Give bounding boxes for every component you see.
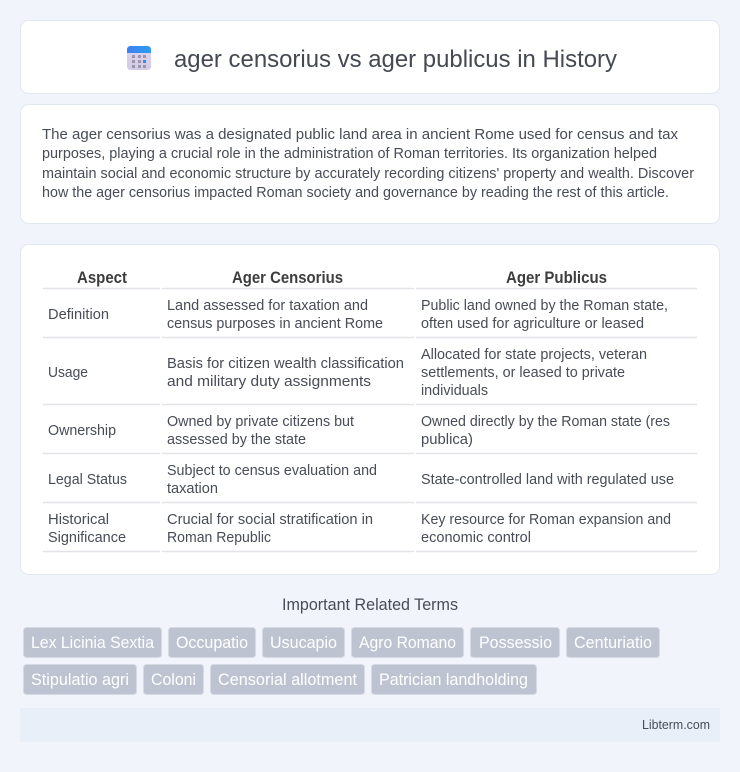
table row: usage (48, 347, 647, 399)
table row: historical significance: Key resource for Roman expansion and (421, 512, 671, 528)
panel: title header (20, 20, 720, 94)
table row: ownership: Owned directly by the Roman state (res (421, 414, 670, 430)
table row: definition: census purposes in ancient Rome (167, 316, 383, 332)
table header: Ager Censorius (232, 269, 343, 287)
title: ager censorius vs ager publicus in History (174, 46, 618, 73)
table row: legal status (48, 463, 674, 497)
table header: Ager Publicus (506, 269, 607, 287)
tags: related terms: Agro Romano (359, 634, 456, 652)
tags: related terms: Censorial allotment (218, 671, 357, 689)
table row: ownership: Ownership (48, 423, 116, 439)
table row: ownership: Owned by private citizens but (167, 414, 354, 430)
table row: definition: Land assessed for taxation and (167, 298, 368, 314)
tags: related terms: Stipulatio agri (31, 671, 129, 689)
table row: ownership: publica) (421, 432, 473, 448)
heading: important related terms: Important Related Terms (282, 596, 458, 614)
table row: ownership (48, 414, 670, 448)
footer (20, 708, 720, 742)
table row: definition: Public land owned by the Roman state, (421, 298, 668, 314)
table header: Aspect (77, 269, 127, 287)
table row: usage: Allocated for state projects, veteran (421, 347, 647, 363)
tags: related terms: Centuriatio (574, 634, 652, 652)
footer: Libterm.com (642, 718, 710, 732)
table row: historical significance: Crucial for social stratification in (167, 512, 373, 528)
text block: introduction paragraph (42, 127, 694, 201)
text block: introduction paragraph: The ager censorius was a designated public land area in ancient Rome used for census and tax (42, 127, 679, 143)
table row: historical significance: Roman Republic (167, 530, 271, 546)
panel: comparison table (20, 244, 720, 574)
panel: introduction (20, 104, 720, 224)
table header (77, 269, 607, 287)
table row: historical significance (48, 512, 671, 546)
icon: calendar (127, 46, 151, 70)
table row: historical significance: economic control (421, 530, 531, 546)
table row: usage: Usage (48, 365, 88, 381)
table row: ownership: assessed by the state (167, 432, 306, 448)
tags: related terms: Usucapio (270, 634, 337, 652)
table row: definition: Definition (48, 307, 109, 323)
tags: related terms: Coloni (151, 671, 196, 689)
table row: legal status: State-controlled land with regulated use (421, 472, 674, 488)
table row: historical significance: Significance (48, 530, 126, 546)
table row: definition (48, 298, 668, 332)
tags: related terms: Possessio (479, 634, 552, 652)
table row: usage: individuals (421, 383, 488, 399)
text block: introduction paragraph: maintain social and economic structure by accurately recording citizens' property and wealth. Discover (42, 166, 694, 182)
tags: related terms (24, 628, 660, 694)
tags: related terms: Patrician landholding (379, 671, 528, 689)
table row: definition: often used for agriculture or leased (421, 316, 644, 332)
table row: usage: Basis for citizen wealth classification (167, 356, 404, 372)
table row: usage: settlements, or leased to private (421, 365, 625, 381)
text block: introduction paragraph: how the ager censorius impacted Roman society and governance by reading the rest of this article. (42, 185, 669, 201)
tags: related terms: Lex Licinia Sextia (31, 634, 155, 652)
table row: usage: and military duty assignments (167, 374, 371, 390)
table row: legal status: Subject to census evaluation and (167, 463, 377, 479)
table row: legal status: Legal Status (48, 472, 127, 488)
tags: related terms: Occupatio (176, 634, 248, 652)
table row: historical significance: Historical (48, 512, 109, 528)
text block: introduction paragraph: purposes, playing a crucial role in the administration of Roman territories. Its organization helped (42, 146, 657, 162)
table row: legal status: taxation (167, 481, 218, 497)
